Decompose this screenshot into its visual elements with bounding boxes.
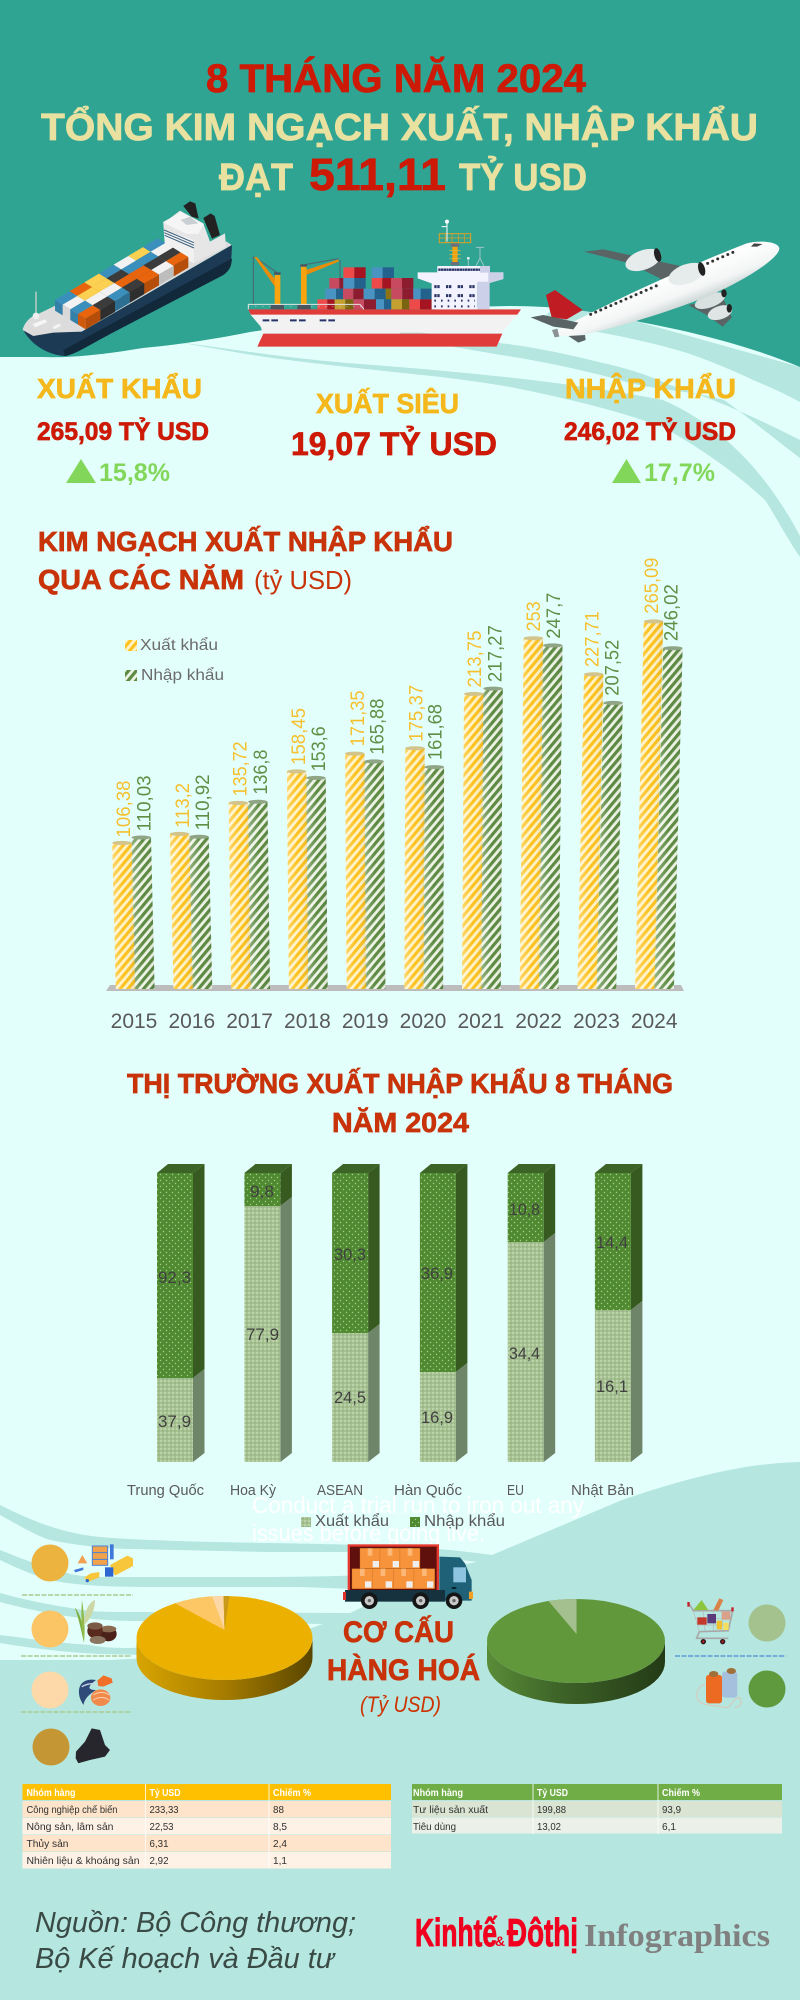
table: goods by use: 13,02 [537,1821,561,1833]
table: export goods: Nhiên liệu & khoáng sản [26,1855,140,1867]
legend item: seafood [32,1672,113,1708]
heading: yearly trade [38,526,453,595]
stacked bar chart: markets: 16,1 [596,1377,628,1396]
bar chart: yearly exports and imports: 171,35 [348,690,369,746]
icon: cargo ship centre [248,220,521,347]
stacked bar chart: markets: 37,9 [158,1412,191,1431]
bar: Nhật Bản [595,1164,642,1462]
icon: fish and shrimp [79,1675,113,1706]
table: export goods: 88 [273,1804,284,1816]
table: export goods: Nông sản, lâm sản [26,1821,114,1833]
stat: export [37,373,209,487]
bar chart: yearly exports and imports: 135,72 [230,741,251,796]
title: 511,11 [309,149,446,200]
icon: container ship left [23,201,232,356]
heading: markets: NĂM 2024 [332,1107,469,1138]
stacked bar chart: markets: Hàn Quốc [394,1482,462,1499]
stat: import [564,373,736,487]
table: goods by use: Tỷ USD [537,1787,568,1799]
table: export goods: Chiếm % [273,1787,312,1799]
stacked bar chart: markets: 10,8 [509,1200,540,1219]
stacked bar chart: markets: 34,4 [509,1344,540,1363]
table: export goods: 1,1 [273,1855,287,1867]
logo: Kinhtế [415,1912,497,1955]
title: 8 THÁNG NĂM 2024 [206,56,587,101]
logo [415,1912,770,1955]
divider [21,1655,132,1657]
stacked bar chart: markets: EU [507,1482,524,1499]
bottom section background with stripes [0,1462,800,2000]
icon: coal [76,1728,110,1763]
stat: export: 15,8% [99,459,170,487]
table: export goods: 2,4 [273,1838,287,1850]
stat: import: NHẬP KHẨU [565,373,736,404]
header teal background [0,0,800,367]
bar chart: yearly exports and imports: 2022 [515,1010,562,1033]
bar chart: yearly exports and imports: 213,75 [465,630,486,688]
legend item: production materials [697,1668,786,1708]
stat: export: XUẤT KHẨU [37,373,202,404]
table: export goods: 8,5 [273,1821,287,1833]
stacked bar chart: markets: 14,4 [596,1233,628,1252]
bar chart: yearly exports and imports: 158,45 [289,708,310,765]
title: TỔNG KIM NGẠCH XUẤT, NHẬP KHẨU [41,104,758,149]
legend item: fuel and minerals [32,1728,110,1766]
stacked bar chart: markets: 77,9 [246,1325,279,1344]
divider [21,1711,132,1713]
stacked bar chart: markets: Trung Quốc [127,1482,204,1499]
bar chart: yearly exports and imports: 165,88 [368,699,389,755]
bar chart: yearly exports and imports: 2019 [342,1010,389,1033]
table: export goods: Tỷ USD [150,1787,181,1799]
bar chart: yearly exports and imports: 2016 [168,1010,215,1033]
table: export goods: 6,31 [150,1838,169,1850]
bar chart: yearly exports and imports: 2018 [284,1010,331,1033]
stacked bar chart: markets: 16,9 [421,1408,453,1427]
icon: rice and timber [75,1600,117,1644]
logo: & [495,1933,505,1949]
stat: import: 246,02 TỶ USD [564,416,736,446]
bar chart: yearly exports and imports: 2020 [400,1010,446,1033]
chart legend: yearly trade: Nhập khẩu [141,666,224,684]
table: export goods: Công nghiệp chế biến [26,1804,118,1816]
heading: yearly trade: KIM NGẠCH XUẤT NHẬP KHẨU [38,526,453,557]
bar chart: yearly exports and imports: 161,68 [425,704,446,760]
pie chart: export goods [136,1596,312,1700]
bar chart: yearly exports and imports: 2024 [631,1010,678,1033]
bar chart: yearly exports and imports: 110,03 [134,775,156,831]
bar: EU [508,1164,555,1462]
table: goods by use: Tiêu dùng [413,1821,456,1833]
icon: airplane [531,242,779,343]
table: goods by use [412,1784,782,1834]
divider [675,1655,786,1657]
bar chart: yearly exports and imports: 217,27 [486,625,506,682]
legend item: consumer goods [687,1598,786,1644]
bar chart: yearly exports and imports: 2021 [457,1010,504,1033]
chart legend: yearly trade: Xuất khẩu [140,636,218,654]
bar chart: yearly exports and imports: 106,38 [114,780,135,838]
bar chart: yearly exports and imports: 136,8 [251,750,272,795]
heading: markets: THỊ TRƯỜNG XUẤT NHẬP KHẨU 8 THÁNG [127,1068,673,1099]
stacked bar chart: markets: 36,9 [421,1264,453,1283]
divider [22,1594,133,1596]
stacked bar chart: markets: 24,5 [334,1388,366,1407]
table: goods by use: Nhóm hàng [413,1787,463,1799]
table: export goods: Thủy sản [26,1838,69,1850]
icon: shopping cart [687,1598,734,1644]
heading: goods structure: CƠ CẤU [343,1615,454,1649]
bar chart: yearly exports and imports [106,558,684,1033]
stat: trade surplus: 19,07 TỶ USD [291,426,497,462]
table: export goods: 2,92 [150,1855,169,1867]
bar: ASEAN [332,1164,380,1462]
stat: trade surplus: XUẤT SIÊU [316,388,459,419]
table: goods by use: 93,9 [662,1804,681,1816]
bar chart: yearly exports and imports: 247,7 [544,593,565,639]
table: export goods: 233,33 [150,1804,179,1816]
legend item: agriculture and forestry [32,1600,117,1648]
heading: goods structure: HÀNG HOÁ [327,1653,480,1687]
heading: markets [127,1068,673,1138]
bar chart: yearly exports and imports: 253 [524,601,545,631]
source note: Nguồn: Bộ Công thương; [35,1907,356,1939]
stacked bar chart: markets: 30,3 [334,1245,366,1264]
icon: thread spools [697,1668,741,1708]
stacked bar chart: markets: Hoa Kỳ [230,1482,276,1499]
title: TỶ USD [459,155,587,199]
title [41,56,758,200]
chart legend: markets [301,1512,505,1530]
heading: goods structure: (Tỷ USD) [360,1692,441,1717]
stray white caption [252,1492,584,1546]
stacked bar chart: markets: Nhật Bản [571,1482,634,1499]
heading: yearly trade: (tỷ USD) [254,565,352,595]
bar chart: yearly exports and imports: 175,37 [406,685,427,742]
bar chart: yearly exports and imports: 227,71 [582,611,604,667]
legend item: processed industry [32,1544,133,1582]
bar: Trung Quốc [157,1164,204,1462]
pie chart: goods by use [487,1599,665,1704]
table: export goods [22,1784,391,1868]
table: export goods: Nhóm hàng [26,1787,76,1799]
stray white caption: issues before going live. [252,1520,485,1546]
stacked bar chart: markets [127,1164,642,1499]
bar chart: yearly exports and imports: 246,02 [662,584,683,641]
bar: Hàn Quốc [420,1164,467,1462]
bar chart: yearly exports and imports: 113,2 [173,783,194,828]
table: goods by use: Chiếm % [662,1787,701,1799]
stacked bar chart: markets: 92,3 [158,1268,191,1287]
table: goods by use: 199,88 [537,1804,566,1816]
bar chart: yearly exports and imports: 2015 [111,1010,157,1033]
bar chart: yearly exports and imports: 153,6 [309,726,330,771]
stacked bar chart: markets: ASEAN [317,1482,363,1499]
chart legend: markets: Nhập khẩu [424,1512,505,1530]
chart legend: yearly trade [125,636,224,684]
icon: delivery truck [343,1544,473,1609]
bar chart: yearly exports and imports: 2017 [226,1010,273,1033]
table: export goods: 22,53 [150,1821,174,1833]
table: goods by use: 6,1 [662,1821,676,1833]
stacked bar chart: markets: 9,8 [250,1182,274,1201]
bar chart: yearly exports and imports: 207,52 [602,640,623,696]
heading: yearly trade: QUA CÁC NĂM [38,564,244,595]
stat: trade surplus [291,388,497,462]
bar chart: yearly exports and imports: 2023 [573,1010,620,1033]
logo: Đôthị [507,1912,578,1955]
source note [35,1907,356,1975]
table: goods by use: Tư liệu sản xuất [413,1804,488,1816]
stray white caption: Conduct a trial run to iron out any [252,1492,584,1518]
bar: Hoa Kỳ [244,1164,292,1462]
title: ĐẠT [219,157,293,199]
stat: export: 265,09 TỶ USD [37,416,209,446]
chart legend: markets: Xuất khẩu [315,1512,389,1530]
stat: import: 17,7% [644,459,715,487]
heading: goods structure [327,1615,480,1717]
icon: warehouse and logistics [74,1544,133,1582]
logo: Infographics [584,1917,770,1953]
bar chart: yearly exports and imports: 265,09 [642,558,663,614]
bar chart: yearly exports and imports: 110,92 [193,774,214,830]
decorative swoosh bands: top [177,300,800,557]
source note: Bộ Kế hoạch và Đầu tư [35,1943,337,1975]
